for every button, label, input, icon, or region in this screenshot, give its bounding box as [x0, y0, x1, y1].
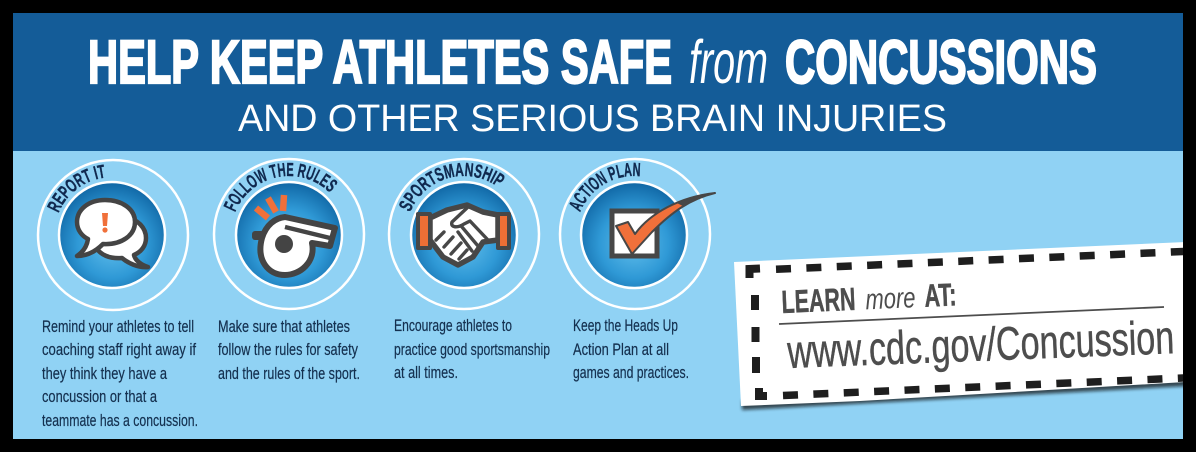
- heading: report it: REPORT IT: [46, 164, 104, 213]
- title line one: from: [689, 28, 768, 96]
- heading: action plan: ACTION PLAN: [569, 162, 640, 212]
- panel: sportsmanship: [388, 158, 550, 382]
- title line two: AND OTHER SERIOUS BRAIN INJURIES: [238, 98, 947, 140]
- panel: light blue background: [13, 151, 1183, 439]
- dashed border: [750, 251, 1190, 396]
- text: sportsmanship: Encourage athletes to: [394, 316, 512, 335]
- panel: action plan: [558, 158, 716, 382]
- panel: title banner: [13, 13, 1183, 151]
- icon: checkbox: [612, 193, 715, 256]
- text: follow the rules: [218, 317, 360, 383]
- text: follow the rules: Make sure that athletes: [218, 317, 350, 336]
- text: sportsmanship: practice good sportsmanship: [394, 340, 550, 359]
- text: learn more at: AT:: [924, 276, 957, 314]
- text: sportsmanship: [394, 316, 550, 382]
- text: follow the rules: follow the rules for safety: [218, 340, 358, 359]
- text: action plan: Keep the Heads Up: [573, 316, 678, 335]
- icon: whistle: [252, 195, 335, 275]
- text: action plan: Action Plan at all: [573, 340, 669, 359]
- icon: handshake: [418, 205, 509, 265]
- text: learn more at: LEARN: [781, 281, 856, 320]
- icon: speech bubbles: [77, 200, 148, 267]
- text: report it: [42, 317, 198, 430]
- text: sportsmanship: at all times.: [394, 363, 458, 382]
- text: report it: they think they have a: [42, 364, 167, 383]
- text: learn more at: more: [865, 282, 916, 316]
- panel: follow the rules: [212, 158, 366, 383]
- title line one: HELP KEEP ATHLETES SAFE: [88, 28, 672, 96]
- text: report it: coaching staff right away if: [42, 340, 196, 359]
- text: action plan: [573, 316, 689, 382]
- callout: learn more coupon: [734, 242, 1190, 410]
- text: report it: concussion or that a: [42, 387, 157, 406]
- panel: report it: [36, 158, 198, 430]
- text: report it: Remind your athletes to tell: [42, 317, 194, 336]
- text: report it: teammate has a concussion.: [42, 411, 198, 430]
- heading: sportsmanship: SPORTSMANSHIP: [399, 162, 505, 211]
- text: learn more at: [782, 283, 955, 314]
- rule: [779, 307, 1164, 324]
- text: action plan: games and practices.: [573, 363, 689, 382]
- heading: follow the rules: FOLLOW THE RULES: [223, 162, 338, 212]
- text: follow the rules: and the rules of the sport.: [218, 364, 360, 383]
